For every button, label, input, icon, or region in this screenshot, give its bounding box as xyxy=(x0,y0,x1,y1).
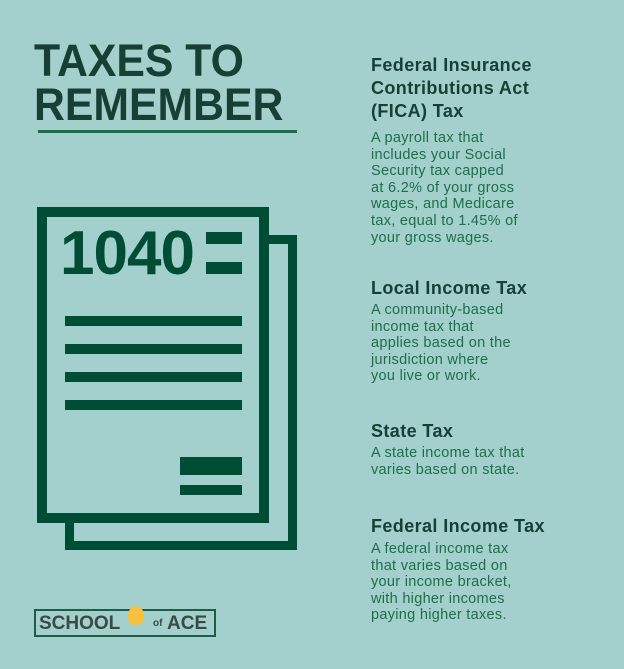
text: state xyxy=(371,445,525,478)
icon: 1040 tax form xyxy=(37,207,297,550)
heading: FICA: Federal Insurance xyxy=(371,55,532,75)
title: REMEMBER xyxy=(34,79,283,130)
title: TAXES TO xyxy=(34,35,244,86)
text: federal income xyxy=(371,541,512,623)
text: FICA: tax, equal to 1.45% of xyxy=(371,213,518,229)
text: FICA: at 6.2% of your gross xyxy=(371,180,514,196)
text: state: A state income tax that xyxy=(371,445,525,461)
heading: federal income: Federal Income Tax xyxy=(371,516,545,536)
text: federal income: that varies based on xyxy=(371,558,508,574)
text: federal income: A federal income tax xyxy=(371,541,508,557)
heading: FICA: Contributions Act xyxy=(371,78,529,98)
logo: School of Ace xyxy=(34,609,216,637)
text: state: varies based on state. xyxy=(371,462,519,478)
text: local: you live or work. xyxy=(371,368,481,384)
text: local: income tax that xyxy=(371,319,474,335)
logo: School of Ace: SCHOOL xyxy=(39,613,120,634)
text: FICA: wages, and Medicare xyxy=(371,196,515,212)
logo: School of Ace: ACE xyxy=(167,613,207,634)
icon: 1040 tax form: 1040 xyxy=(60,219,194,288)
text: FICA xyxy=(371,130,518,246)
text: local: jurisdiction where xyxy=(371,352,488,368)
text: FICA: A payroll tax that xyxy=(371,130,484,146)
text: FICA: Security tax capped xyxy=(371,163,504,179)
text: FICA: includes your Social xyxy=(371,147,506,163)
heading: FICA: (FICA) Tax xyxy=(371,101,464,121)
text: FICA: your gross wages. xyxy=(371,230,494,246)
text: local: applies based on the xyxy=(371,335,511,351)
text: federal income: your income bracket, xyxy=(371,574,512,590)
heading: local: Local Income Tax xyxy=(371,278,527,298)
text: local: A community-based xyxy=(371,302,503,318)
heading: state: State Tax xyxy=(371,421,453,441)
title xyxy=(34,35,283,130)
text: local xyxy=(370,302,511,384)
logo: School of Ace: of xyxy=(153,618,162,629)
heading: FICA xyxy=(371,55,532,121)
text: federal income: with higher incomes xyxy=(371,591,505,607)
text: federal income: paying higher taxes. xyxy=(371,607,507,623)
title underline xyxy=(38,130,297,133)
